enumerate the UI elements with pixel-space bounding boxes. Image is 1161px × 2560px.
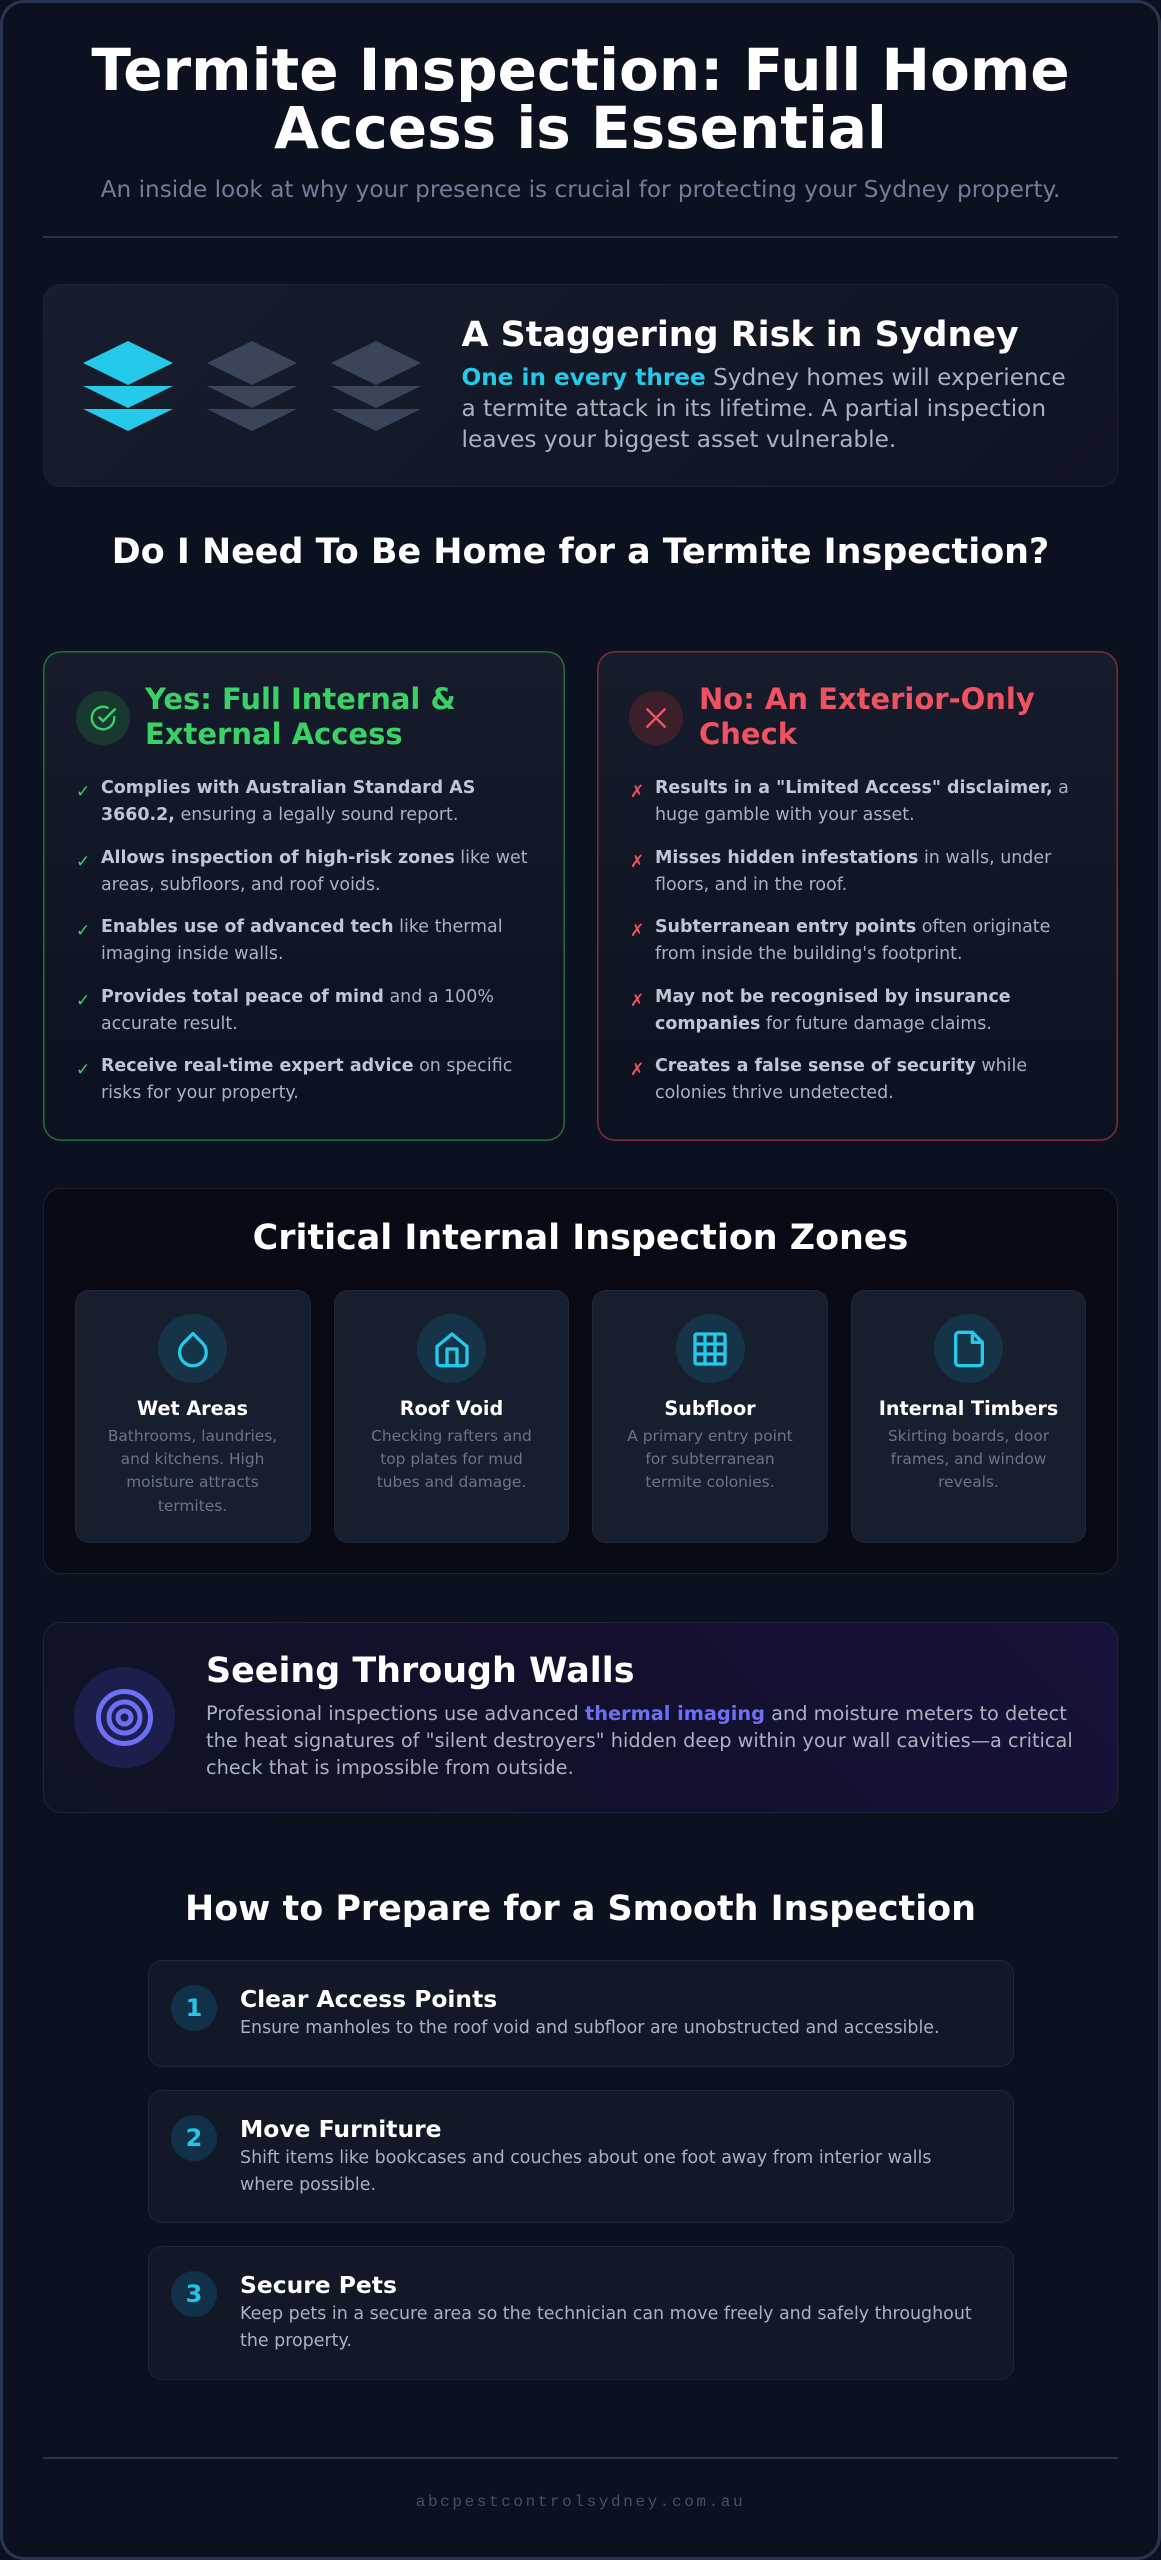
step 2: where possible. [240,2174,376,2194]
yes item 3: Enables use of advanced tech like thermal [101,917,503,937]
card: subfloor [592,1290,828,1543]
card: roof void: Checking rafters and [371,1427,532,1445]
yes item 2 [76,848,528,895]
risk text: One in every three Sydney homes will experience [462,364,1066,391]
no item 4: companies for future damage claims. [655,1014,992,1034]
card: internal timbers: reveals. [938,1473,999,1491]
yes item 5: Receive real-time expert advice on specific [101,1056,512,1076]
section heading: do I need to be home: Do I Need To Be Home for a Termite Inspection? [112,532,1049,572]
no item 3: from inside the building's footprint. [655,944,963,964]
step 1: Clear Access Points [240,1985,497,2013]
card: wet areas: Bathrooms, laundries, [108,1427,277,1445]
thermal text [206,1702,1073,1779]
yes item 5: ✓ [76,1060,90,1080]
thermal heading: Seeing Through Walls [206,1651,634,1691]
no item 4: ✗ [630,991,644,1011]
no item 2: floors, and in the roof. [655,875,847,895]
card: subfloor: Subfloor [664,1397,756,1420]
no item 1 [630,778,1069,825]
yes item 1: Complies with Australian Standard AS [101,778,475,798]
card: wet areas [74,1290,310,1543]
yes item 3 [76,917,503,964]
icon: x circle [629,691,683,745]
no item 2: ✗ [630,852,644,872]
title: Access is Essential [274,94,887,162]
risk text: leaves your biggest asset vulnerable. [462,426,896,453]
risk heading: A Staggering Risk in Sydney [462,315,1019,355]
card: roof void: tubes and damage. [377,1473,526,1491]
yes item 3: ✓ [76,921,90,941]
step 3: Keep pets in a secure area so the technician can move freely and safely throughout [240,2304,972,2324]
panel: critical internal inspection zones [43,1188,1118,1574]
card: internal timbers: Internal Timbers [879,1397,1058,1420]
card: internal timbers: frames, and window [891,1450,1046,1468]
step number 3 [171,2271,217,2317]
yes item 2: areas, subfloors, and roof voids. [101,875,381,895]
no heading: No: An Exterior-Only [699,682,1035,716]
card: roof void: Roof Void [400,1397,503,1420]
step 2: Shift items like bookcases and couches about one foot away from interior walls [240,2148,931,2168]
yes heading [144,682,456,750]
step number 2 [171,2115,217,2161]
subtitle: An inside look at why your presence is crucial for protecting your Sydney property. [101,176,1060,203]
thermal text: check that is impossible from outside. [206,1756,574,1779]
no item 4: May not be recognised by insurance [655,987,1011,1007]
step number 3: 3 [186,2280,202,2308]
no heading: Check [699,716,797,750]
yes item 5: risks for your property. [101,1083,299,1103]
yes item 4 [76,987,494,1034]
risk text: a termite attack in its lifetime. A partial inspection [462,395,1046,422]
no item 4 [630,987,1011,1034]
yes item 3: imaging inside walls. [101,944,284,964]
card: wet areas: Wet Areas [137,1397,248,1420]
step 3: the property. [240,2330,352,2350]
no item 2: Misses hidden infestations in walls, under [655,848,1051,868]
card: subfloor: termite colonies. [645,1473,775,1491]
step 3: Secure Pets [240,2271,397,2299]
step 2: Move Furniture [240,2115,442,2143]
no item 5: ✗ [630,1060,644,1080]
no item 1: huge gamble with your asset. [655,805,915,825]
card: subfloor: for subterranean [645,1450,775,1468]
card: roof void [334,1290,569,1543]
yes item 4: ✓ [76,991,90,1011]
yes item 2: ✓ [76,852,90,872]
icon: house [417,1314,486,1383]
step number 1 [171,1985,217,2031]
step 1 [148,1960,1014,2067]
yes item 2: Allows inspection of high-risk zones like wet [101,848,528,868]
no item 3 [630,917,1050,964]
no item 3: ✗ [630,921,644,941]
no item 1: Results in a "Limited Access" disclaimer, a [655,778,1069,798]
panel: yes full access [43,651,565,1141]
icon: thermal target [74,1667,175,1768]
footer website: abcpestcontrolsydney.com.au [416,2493,745,2511]
icon: one in three homes [83,341,421,431]
step 1: Ensure manholes to the roof void and subfloor are unobstructed and accessible. [240,2018,940,2038]
title: Termite Inspection: Full Home [91,36,1070,104]
no item 5: colonies thrive undetected. [655,1083,894,1103]
no heading [699,682,1035,750]
yes item 1: ✓ [76,782,90,802]
zones heading: Critical Internal Inspection Zones [253,1218,908,1258]
icon: check circle [76,691,130,745]
step 3 text [240,2271,972,2350]
card: subfloor: A primary entry point [627,1427,793,1445]
yes item 4: Provides total peace of mind and a 100% [101,987,494,1007]
thermal text: the heat signatures of "silent destroyers" hidden deep within your wall cavities—a critical [206,1729,1073,1752]
no item 5: Creates a false sense of security while [655,1056,1027,1076]
card: roof void: top plates for mud [380,1450,523,1468]
step 1 text [240,1985,940,2038]
no item 3: Subterranean entry points often originate [655,917,1050,937]
yes item 5 [76,1056,512,1103]
yes item 4: accurate result. [101,1014,238,1034]
yes item 1: 3660.2, ensuring a legally sound report. [101,805,458,825]
step 2 [148,2090,1014,2223]
step 2 text [240,2115,931,2194]
panel: seeing through walls [43,1622,1118,1813]
panel: staggering risk [43,284,1118,487]
section heading: how to prepare: How to Prepare for a Smooth Inspection [185,1889,976,1929]
title [91,36,1070,162]
step 3 [148,2246,1014,2380]
no item 1: ✗ [630,782,644,802]
yes heading: External Access [145,716,403,750]
no item 5 [630,1056,1027,1103]
card: internal timbers: Skirting boards, door [888,1427,1049,1445]
risk text [462,364,1066,453]
icon: grid [676,1314,744,1383]
card: wet areas: moisture attracts [126,1473,259,1491]
yes heading: Yes: Full Internal & [145,682,456,716]
step number 1: 1 [186,1994,202,2022]
icon: document [934,1314,1003,1383]
no item 2 [630,848,1052,895]
panel: no exterior only [597,651,1118,1141]
card: internal timbers [851,1290,1086,1543]
yes item 1 [76,778,475,825]
thermal text: Professional inspections use advanced thermal imaging and moisture meters to detect [206,1702,1067,1725]
icon: water drop [158,1314,227,1383]
card: wet areas: termites. [158,1497,227,1515]
step number 2: 2 [186,2124,202,2152]
card: wet areas: and kitchens. High [121,1450,264,1468]
